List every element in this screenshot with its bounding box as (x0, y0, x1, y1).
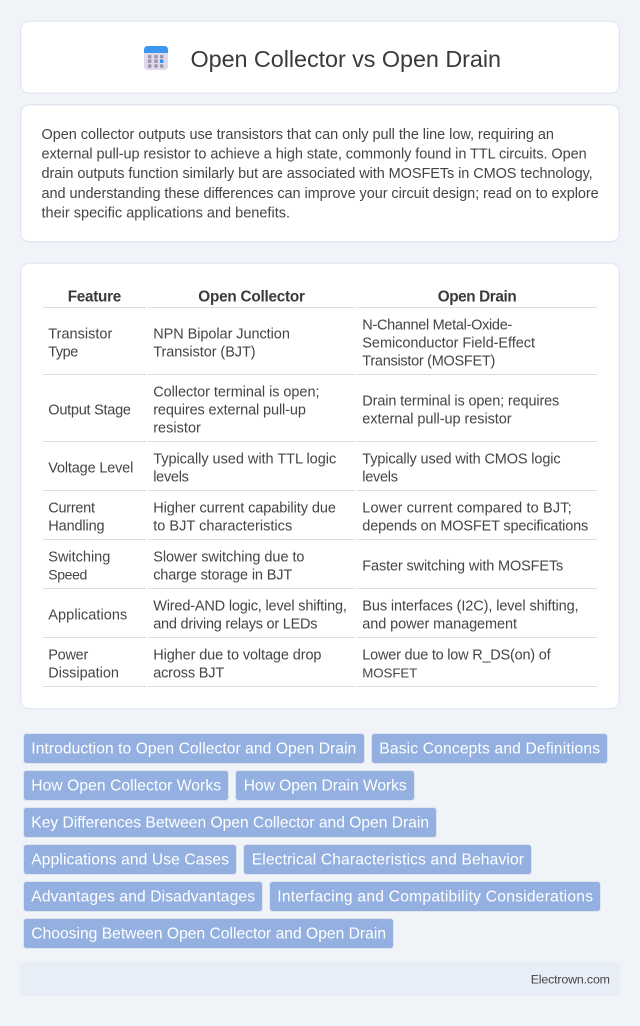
tag: basic concepts (372, 734, 608, 764)
row: transistor type: N-Channel Metal-Oxide- (362, 317, 512, 333)
row: power dissipation: Lower due to low R_DS(on) of (362, 647, 552, 663)
row: voltage level: Voltage Level (48, 460, 133, 476)
tag: how open collector works (24, 770, 228, 800)
table header row (43, 289, 597, 308)
tag: applications: Applications and Use Cases (31, 852, 229, 869)
table header row: Feature (68, 289, 121, 306)
panel: topic tags (24, 734, 608, 948)
row: output stage: external pull-up resistor (362, 411, 512, 427)
row: current handling: to BJT characteristics (153, 518, 292, 534)
tag: basic concepts: Basic Concepts and Definitions (379, 741, 600, 758)
intro paragraph: and understanding these differences can improve your circuit design; read on to explore (42, 186, 599, 202)
tag: key differences (24, 808, 436, 838)
row: power dissipation: across BJT (153, 665, 224, 681)
row: switching speed: Speed (48, 566, 87, 582)
table header row: Open Collector (198, 289, 305, 306)
panel: introduction (21, 105, 619, 242)
row: current handling: Current (48, 500, 95, 516)
tag: interfacing (270, 882, 600, 912)
row: output stage: Collector terminal is open; (153, 384, 320, 400)
row: voltage level: Typically used with CMOS logic (362, 451, 561, 467)
row: power dissipation: Power (48, 647, 88, 663)
row: voltage level (43, 451, 597, 491)
row: current handling: Handling (48, 518, 105, 534)
tag: how open drain works: How Open Drain Works (244, 778, 407, 795)
row: output stage: Output Stage (48, 402, 131, 418)
tag: how open collector works: How Open Collector Works (31, 778, 221, 795)
tag: electrical characteristics: Electrical Characteristics and Behavior (252, 852, 524, 869)
tag: electrical characteristics (244, 844, 532, 874)
tag: key differences: Key Differences Between Open Collector and Open Drain (31, 815, 429, 832)
table header row: Open Drain (438, 289, 517, 306)
row: applications: Wired-AND logic, level shifting, (153, 598, 347, 614)
row: power dissipation (43, 647, 597, 687)
row: power dissipation: Higher due to voltage drop (153, 647, 322, 663)
icon: calendar grid (144, 46, 168, 70)
row: voltage level: levels (362, 469, 398, 485)
tag: introduction: Introduction to Open Collector and Open Drain (31, 741, 356, 758)
row: transistor type: Type (48, 344, 78, 360)
row: output stage: requires external pull-up (153, 402, 306, 418)
row: applications (43, 598, 597, 638)
row: switching speed: charge storage in BJT (153, 567, 292, 583)
row: transistor type: Transistor (MOSFET) (362, 353, 495, 369)
row: current handling: depends on MOSFET specifications (362, 518, 588, 534)
row: current handling: Higher current capability due (153, 500, 336, 516)
intro paragraph: drain outputs function similarly but are associated with MOSFETs in CMOS technology, (42, 166, 593, 182)
row: output stage (43, 384, 597, 442)
panel: comparison table (21, 263, 619, 709)
row: transistor type: Transistor (48, 326, 112, 342)
row: switching speed: Slower switching due to (153, 549, 304, 565)
footer (20, 962, 620, 996)
tag: interfacing: Interfacing and Compatibility Considerations (277, 889, 593, 906)
tag: choosing: Choosing Between Open Collector and Open Drain (31, 926, 386, 943)
intro paragraph: external pull-up resistor to achieve a high state, commonly found in TTL circuits. Open (42, 147, 587, 163)
tag: advantages: Advantages and Disadvantages (31, 889, 255, 906)
row: switching speed: Switching (48, 549, 110, 565)
panel: header (21, 21, 619, 93)
row: transistor type (43, 317, 597, 375)
row: output stage: resistor (153, 420, 201, 436)
row: current handling (43, 500, 597, 540)
row: current handling: Lower current compared to BJT; (362, 500, 572, 516)
row: applications: and power management (362, 616, 517, 632)
row: transistor type: Semiconductor Field-Effect (362, 335, 535, 351)
tag: how open drain works (236, 770, 414, 800)
row: applications: Applications (48, 607, 127, 623)
tag: introduction (24, 734, 364, 764)
row: voltage level: Typically used with TTL logic (153, 451, 336, 467)
row: applications: Bus interfaces (I2C), level shifting, (362, 598, 579, 614)
intro paragraph (42, 127, 599, 221)
row: transistor type: NPN Bipolar Junction (153, 326, 290, 342)
tag: advantages (24, 882, 262, 912)
title: Open Collector vs Open Drain (190, 46, 501, 72)
tag: applications (24, 844, 236, 874)
row: switching speed: Faster switching with MOSFETs (362, 558, 563, 574)
tag: choosing (24, 918, 394, 948)
row: applications: and driving relays or LEDs (153, 616, 318, 632)
footer credit: Electrown.com (531, 972, 610, 986)
intro paragraph: their specific applications and benefits. (42, 205, 290, 221)
row: power dissipation: MOSFET (362, 665, 417, 680)
row: power dissipation: Dissipation (48, 665, 119, 681)
row: output stage: Drain terminal is open; requires (362, 393, 559, 409)
row: voltage level: levels (153, 469, 189, 485)
intro paragraph: Open collector outputs use transistors that can only pull the line low, requiring an (42, 127, 554, 143)
row: transistor type: Transistor (BJT) (153, 344, 256, 360)
row: switching speed (43, 549, 597, 589)
